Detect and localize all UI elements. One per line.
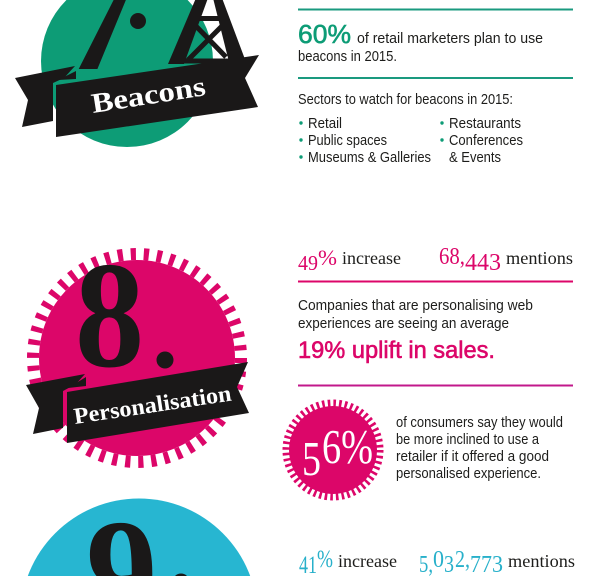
panel: number nine badge <box>20 489 258 576</box>
badge: 56 percent: 6% <box>322 419 373 474</box>
text: companies personalising: experiences are seeing an average <box>298 315 509 332</box>
badge: 56 percent: 5 <box>302 431 321 486</box>
panel: beacons badge <box>15 0 259 147</box>
blue circle <box>20 498 258 576</box>
panel: personalisation badge <box>26 232 249 462</box>
list: sectors column one: Public spaces <box>308 132 387 149</box>
text: sectors heading: Sectors to watch for beacons in 2015: <box>298 91 513 108</box>
list: sectors column one: Museums & Galleries <box>308 149 431 166</box>
text: consumers: personalised experience. <box>396 465 541 482</box>
stat: 41 percent increase: % <box>317 546 333 573</box>
text: consumers: of consumers say they would <box>396 414 563 431</box>
text: companies personalising: Companies that are personalising web <box>298 297 533 314</box>
number 8: 8 <box>75 232 144 399</box>
stat: uplift in sales: 19% uplift in sales. <box>298 337 495 364</box>
stat: 68,443 mentions: mentions <box>506 248 573 268</box>
panel: number nine facts <box>299 546 575 576</box>
stat: 68,443 mentions <box>439 244 573 276</box>
green circle <box>41 0 213 147</box>
list: sectors column two: & Events <box>449 149 501 166</box>
stat: 49 percent increase: 49 <box>298 251 318 275</box>
icon: radio tower <box>168 0 246 64</box>
badge: 56 percent <box>286 403 380 497</box>
ribbon: personalisation <box>26 362 249 443</box>
panel: beacons facts <box>298 10 573 166</box>
stat: 68,443 mentions: 68, <box>439 244 465 270</box>
text: companies personalising <box>298 297 533 332</box>
ribbon label: Personalisation <box>72 381 233 429</box>
ribbon label: Beacons <box>89 71 208 120</box>
text: consumers: be more inclined to use a <box>396 431 540 448</box>
stat: 5,032,773 mentions: 2, <box>455 547 470 573</box>
text: consumers <box>396 414 563 482</box>
stat: 41 percent increase: increase <box>338 551 397 571</box>
stat: 49 percent increase <box>298 245 401 275</box>
text: retail marketers <box>298 30 543 65</box>
stat: 41 percent increase <box>299 546 397 576</box>
text: retail marketers: of retail marketers plan to use <box>357 30 543 47</box>
list: sectors column one: Retail <box>308 115 342 132</box>
list: sectors column two: Restaurants <box>449 115 521 132</box>
list: sectors column two <box>440 115 523 166</box>
stat: 49 percent increase: increase <box>342 248 401 268</box>
panel: personalisation facts <box>286 244 573 497</box>
stat: 60 percent: 60% <box>298 19 351 49</box>
list: sectors column two: Conferences <box>449 132 523 149</box>
text: consumers: retailer if it offered a good <box>396 448 549 465</box>
stat: 68,443 mentions: 443 <box>465 250 501 276</box>
list: sectors column one <box>299 115 431 166</box>
stat: 5,032,773 mentions <box>419 547 575 576</box>
ribbon: beacons <box>15 55 259 137</box>
stat: 49 percent increase: % <box>318 245 337 270</box>
stat: 5,032,773 mentions: mentions <box>508 551 575 571</box>
text: retail marketers: beacons in 2015. <box>298 48 397 65</box>
pink sunburst circle <box>33 254 241 462</box>
stat: 5,032,773 mentions: 0 <box>433 547 444 573</box>
